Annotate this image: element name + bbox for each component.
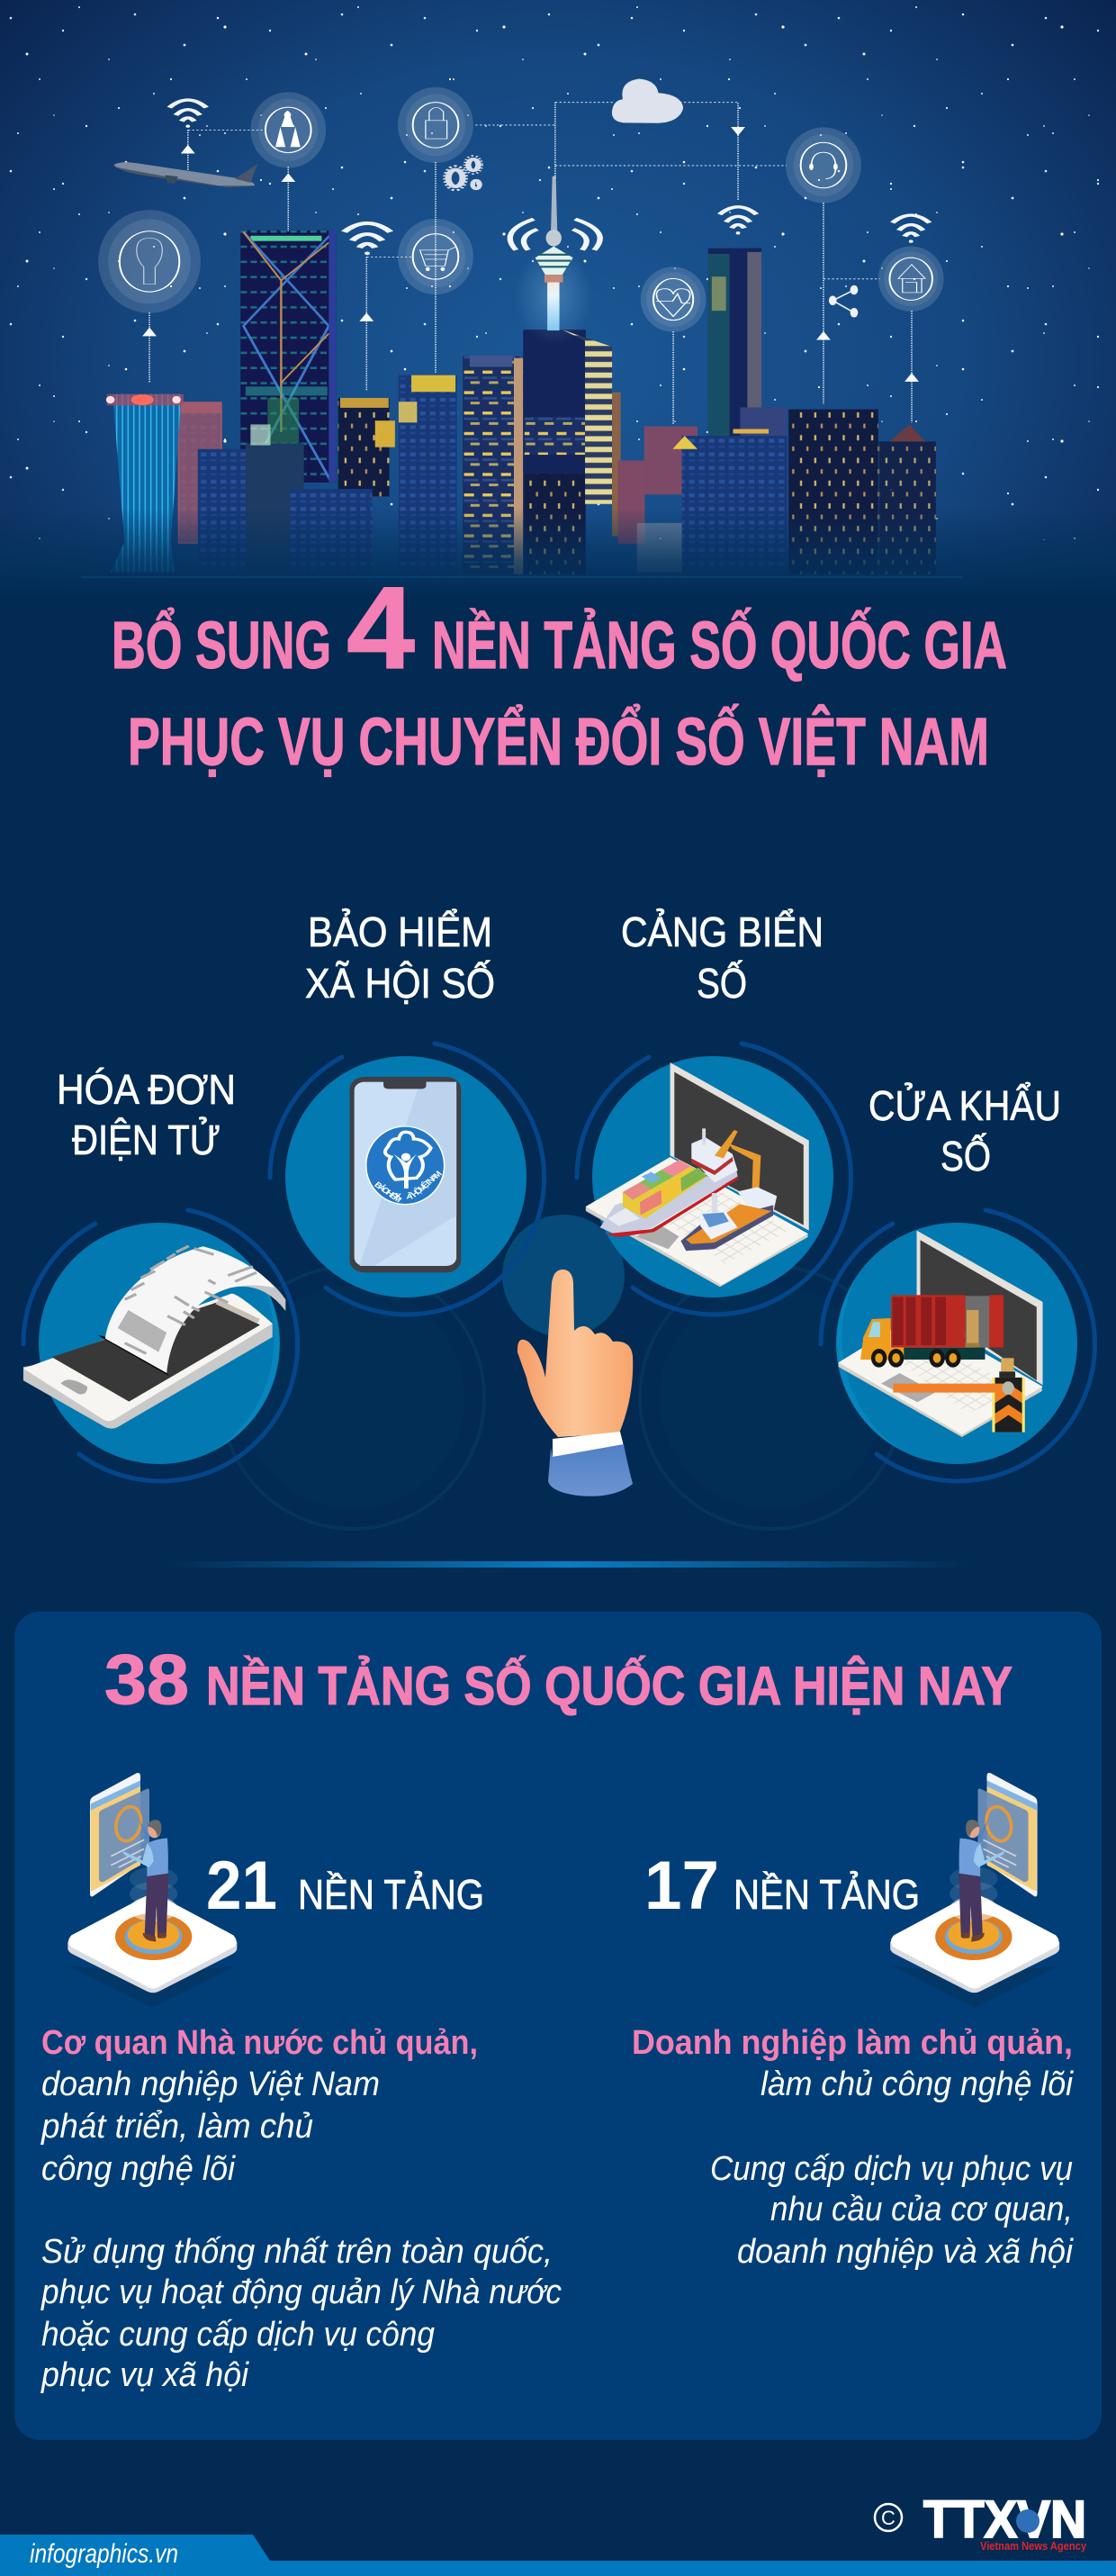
label: ĐIỆN TỬ [72,1116,220,1163]
right column text [632,2024,1074,2271]
right column text: làm chủ công nghệ lõi [760,2065,1074,2103]
cylindrical blue tower [106,394,184,573]
count: 17 platforms: NỀN TẢNG [734,1871,920,1918]
big number 4: 4 [346,562,415,693]
label: HÓA ĐƠN [57,1066,236,1113]
label [868,1082,1061,1180]
night sky [0,0,1116,594]
icon: heart [641,267,706,332]
platform: Cửa khẩu số [821,1082,1095,1481]
title [112,562,1007,779]
skyline buildings [178,230,936,574]
faint background rings [221,1266,903,1529]
icon: pointing hand [518,1270,633,1496]
icon: smartphone with social insurance logo: XÃ [395,1192,413,1201]
blue disc with arcs [821,1210,1095,1481]
icon: user on platform left [68,1773,237,2008]
left column text: phục vụ xã hội [40,2356,249,2394]
panel heading [104,1640,1012,1719]
label: BẢO HIỂM [308,908,492,955]
source url: infographics.vn [30,2539,178,2569]
right column text: Cung cấp dịch vụ phục vụ [710,2150,1073,2188]
panel background [14,1612,1102,2440]
label: SỐ [697,960,747,1007]
label [621,908,824,1007]
count: 17 platforms [644,1848,920,1924]
icon: people [250,92,326,167]
panel heading: NỀN TẢNG SỐ QUỐC GIA HIỆN NAY [206,1656,1012,1716]
icon: share [829,285,858,317]
icon: gears [445,156,482,190]
right column text: doanh nghiệp và xã hội [737,2233,1074,2271]
left column text: hoặc cung cấp dịch vụ công [41,2316,435,2354]
title line 1 left: BỔ SUNG [112,608,331,682]
left column text: Sử dụng thống nhất trên toàn quốc, [41,2233,553,2271]
wifi icons [169,100,930,255]
label: CẢNG BIỂN [621,908,824,955]
icon: phone with receipt [23,1246,285,1429]
label [305,908,495,1007]
logo: TTXVN: Vietnam News Agency [980,2539,1087,2553]
blue disc with arcs [577,1044,851,1315]
label: CỬA KHẨU [868,1082,1061,1129]
platform: Hóa đơn điện tử [23,1066,298,1481]
blue disc with arcs [270,1044,544,1315]
fade at city base [0,508,1116,595]
icon: smartphone with social insurance logo [350,1077,461,1272]
footer ribbon [0,2535,1116,2576]
count: 17 platforms: 17 [644,1848,719,1924]
copyright mark: C [881,2507,896,2529]
panel: 38 platforms [14,1612,1102,2440]
slab glow under skyline [81,576,963,578]
icon: smartphone with social insurance logo: HỘI VIỆT NAM [409,1169,445,1199]
icon: lock [398,87,473,163]
left column text: doanh nghiệp Việt Nam [41,2065,380,2103]
dotted connection lines [149,103,912,424]
icon: smartphone with social insurance logo: BẢO HIỂM [372,1180,404,1205]
count: 21 platforms [206,1848,484,1924]
right column text: Doanh nghiệp làm chủ quản, [632,2024,1073,2062]
icon: user on platform right [890,1773,1059,2008]
left column text [40,2024,562,2394]
footer [0,2490,1116,2576]
copyright mark [875,2504,902,2531]
icon: light bulb [98,210,201,313]
glowing divider [162,1561,972,1568]
left column text: công nghệ lõi [41,2150,236,2188]
icon: shopping cart [398,219,473,294]
logo: TTXVN: TTXVN [923,2490,1086,2549]
icon: headset [786,127,861,203]
right column text: nhu cầu của cơ quan, [770,2191,1073,2228]
count: 21 platforms: 21 [206,1848,277,1924]
label [57,1066,236,1163]
blue disc with arcs [23,1210,298,1481]
icon: house [878,247,944,312]
bright communication tower [515,176,593,345]
arrowheads [142,127,919,382]
center dial behind hand [502,1215,625,1337]
icon: laptop with container ships [586,1062,809,1287]
left column text: phát triển, làm chủ [40,2108,313,2146]
platform: Bảo hiểm xã hội số [270,908,544,1315]
left column text: phục vụ hoạt động quản lý Nhà nước [40,2273,562,2311]
hero: night city skyline with network icons [0,0,1116,595]
panel heading: 38 [104,1640,189,1719]
label: SỐ [940,1133,991,1180]
count: 21 platforms: NỀN TẢNG [298,1871,484,1918]
label: XÃ HỘI SỐ [305,960,495,1007]
icon: airplane [114,162,257,187]
platform: Cảng biển số [577,908,851,1315]
icon: cloud [612,79,683,123]
icon: laptop with truck and border gate [839,1231,1043,1437]
left column text: Cơ quan Nhà nước chủ quản, [41,2024,478,2062]
